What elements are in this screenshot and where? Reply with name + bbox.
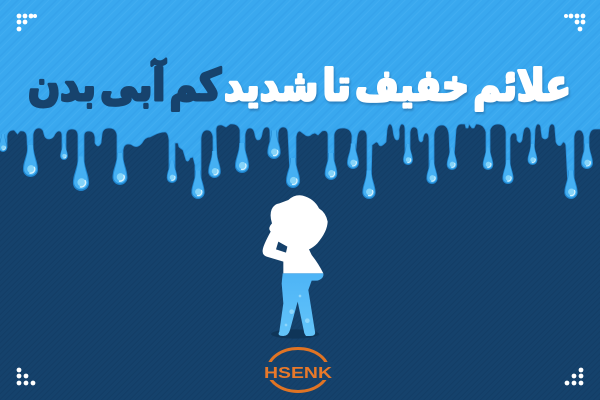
logo: HSENK: [262, 348, 334, 392]
figure: water filled lower body: [279, 273, 323, 336]
figure: empty white upper body: [263, 195, 328, 273]
title: dark part: کم آبی بدن: [28, 59, 221, 111]
decoration: top left dots: [17, 14, 37, 31]
droplets hanging from the water drips: [0, 130, 593, 199]
figure: person half filled with water: [263, 195, 328, 339]
decoration: top right dots: [564, 14, 585, 31]
figure: bubbles: [285, 295, 310, 326]
figure: ground shadow: [271, 329, 319, 339]
panel: dark blue lower area with dripping edge: [0, 124, 600, 400]
decoration: bottom right dots: [565, 368, 583, 385]
decoration: bottom left dots: [17, 368, 35, 385]
logo: HSENK: HSENK: [264, 365, 333, 382]
